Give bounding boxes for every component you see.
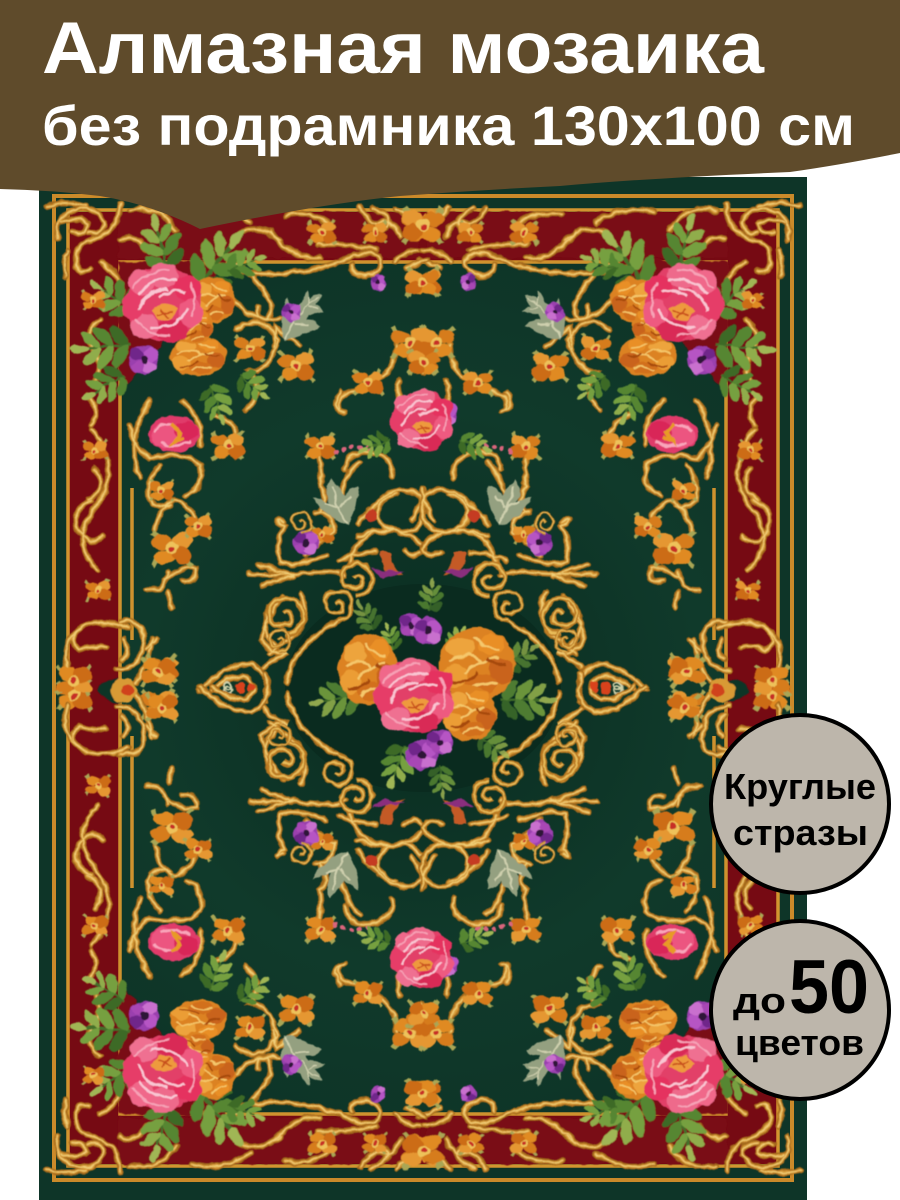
central bouquet (305, 576, 558, 801)
outer gold border lines (54, 196, 792, 1180)
painted ornaments (46, 203, 800, 1173)
bottom medallion flower (352, 919, 498, 988)
right cartouche bud (709, 678, 750, 702)
medallion dark centre (285, 584, 561, 792)
banner shape (0, 0, 900, 229)
ornament quarter: top right (402, 203, 800, 719)
title: Алмазная мозаика (42, 8, 766, 89)
badge: up to 50 colours (711, 921, 889, 1099)
ornament quarter: bottom right (402, 657, 800, 1173)
red border band (68, 212, 778, 1164)
badge: up to 50 colours: до (733, 980, 786, 1021)
header banner (0, 0, 900, 229)
badge: round rhinestones: Круглые (724, 766, 876, 807)
left cartouche bud (96, 678, 137, 702)
badge: round rhinestones: стразы (733, 812, 868, 853)
carpet artwork (39, 177, 807, 1200)
central green field (120, 262, 726, 1114)
subtitle: без подрамника 130х100 см (42, 94, 855, 157)
carpet base (39, 177, 807, 1200)
badge: up to 50 colours: цветов (735, 1022, 864, 1063)
badge: round rhinestones (711, 715, 889, 893)
inner gold rail (132, 488, 714, 888)
badge: up to 50 colours: 50 (789, 945, 869, 1030)
ornament quarter: top left (46, 203, 444, 719)
top medallion flower (352, 389, 498, 465)
ornament quarter: bottom left (46, 657, 444, 1173)
